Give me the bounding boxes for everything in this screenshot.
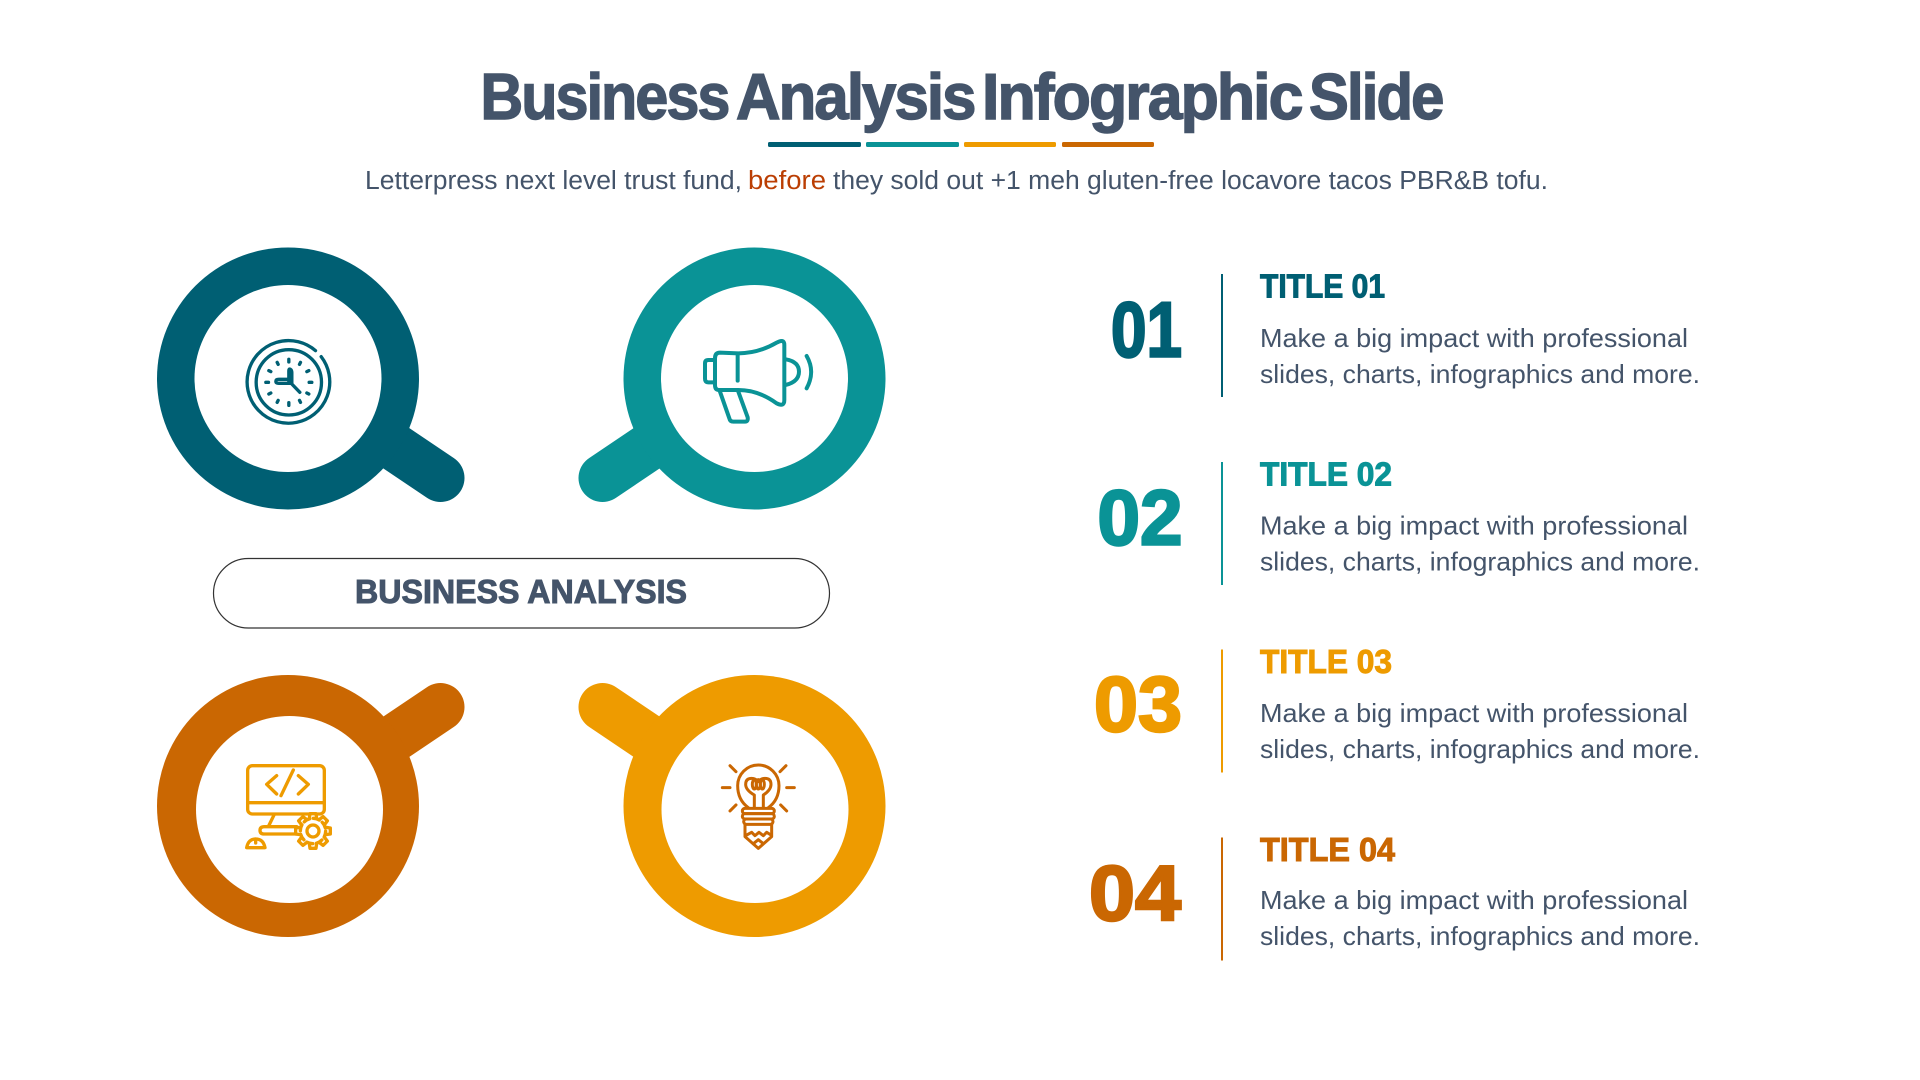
list item 02: Make a big impact with professional bbox=[1260, 510, 1688, 540]
icon: clock bbox=[247, 341, 330, 423]
subtitle: they sold out +1 meh gluten-free locavore tacos PBR&B tofu. bbox=[833, 167, 1548, 195]
list item 01: TITLE 01 bbox=[1260, 268, 1385, 304]
list item 01: slides, charts, infographics and more. bbox=[1260, 359, 1700, 389]
list item 02: slides, charts, infographics and more. bbox=[1260, 546, 1700, 576]
list item 03: 03 bbox=[1094, 660, 1182, 748]
icon: code monitor with gear bbox=[247, 766, 330, 848]
list item 04: Make a big impact with professional bbox=[1260, 885, 1688, 915]
list item 02: 02 bbox=[1098, 474, 1182, 562]
title underline: four coloured bars bbox=[768, 142, 1154, 147]
list item 01: 01 bbox=[1111, 286, 1182, 374]
subtitle: before bbox=[748, 167, 826, 195]
magnifier 1: clock, dark teal bbox=[157, 248, 440, 510]
title: Analysis bbox=[736, 60, 974, 133]
magnifier 3: code monitor, burnt orange bbox=[157, 675, 440, 937]
list item 04: slides, charts, infographics and more. bbox=[1260, 921, 1700, 951]
subtitle: Letterpress next level trust fund, bbox=[365, 167, 742, 195]
central pill label bbox=[214, 558, 830, 628]
list item 03: slides, charts, infographics and more. bbox=[1260, 734, 1700, 764]
central pill label: BUSINESS ANALYSIS bbox=[355, 573, 687, 610]
list item 04: TITLE 04 bbox=[1260, 831, 1396, 868]
list item 04 bbox=[1089, 831, 1700, 960]
icon: megaphone bbox=[705, 341, 811, 422]
list item 02: TITLE 02 bbox=[1260, 456, 1392, 492]
list item 04: 04 bbox=[1089, 849, 1181, 937]
magnifier 2: megaphone, teal bbox=[602, 248, 886, 510]
list item 02 bbox=[1098, 456, 1700, 585]
title: Business bbox=[480, 60, 728, 133]
title: Slide bbox=[1309, 60, 1442, 133]
list item 03 bbox=[1094, 643, 1700, 772]
subtitle bbox=[365, 167, 1548, 195]
list item 03: TITLE 03 bbox=[1260, 643, 1392, 680]
icon: light bulb with pencil bbox=[722, 765, 794, 848]
list item 01: Make a big impact with professional bbox=[1260, 323, 1688, 353]
list item 03: Make a big impact with professional bbox=[1260, 698, 1688, 728]
title: Infographic bbox=[982, 60, 1302, 133]
magnifier 4: light bulb, amber bbox=[602, 675, 886, 937]
list item 01 bbox=[1111, 268, 1700, 397]
title bbox=[480, 60, 1442, 133]
